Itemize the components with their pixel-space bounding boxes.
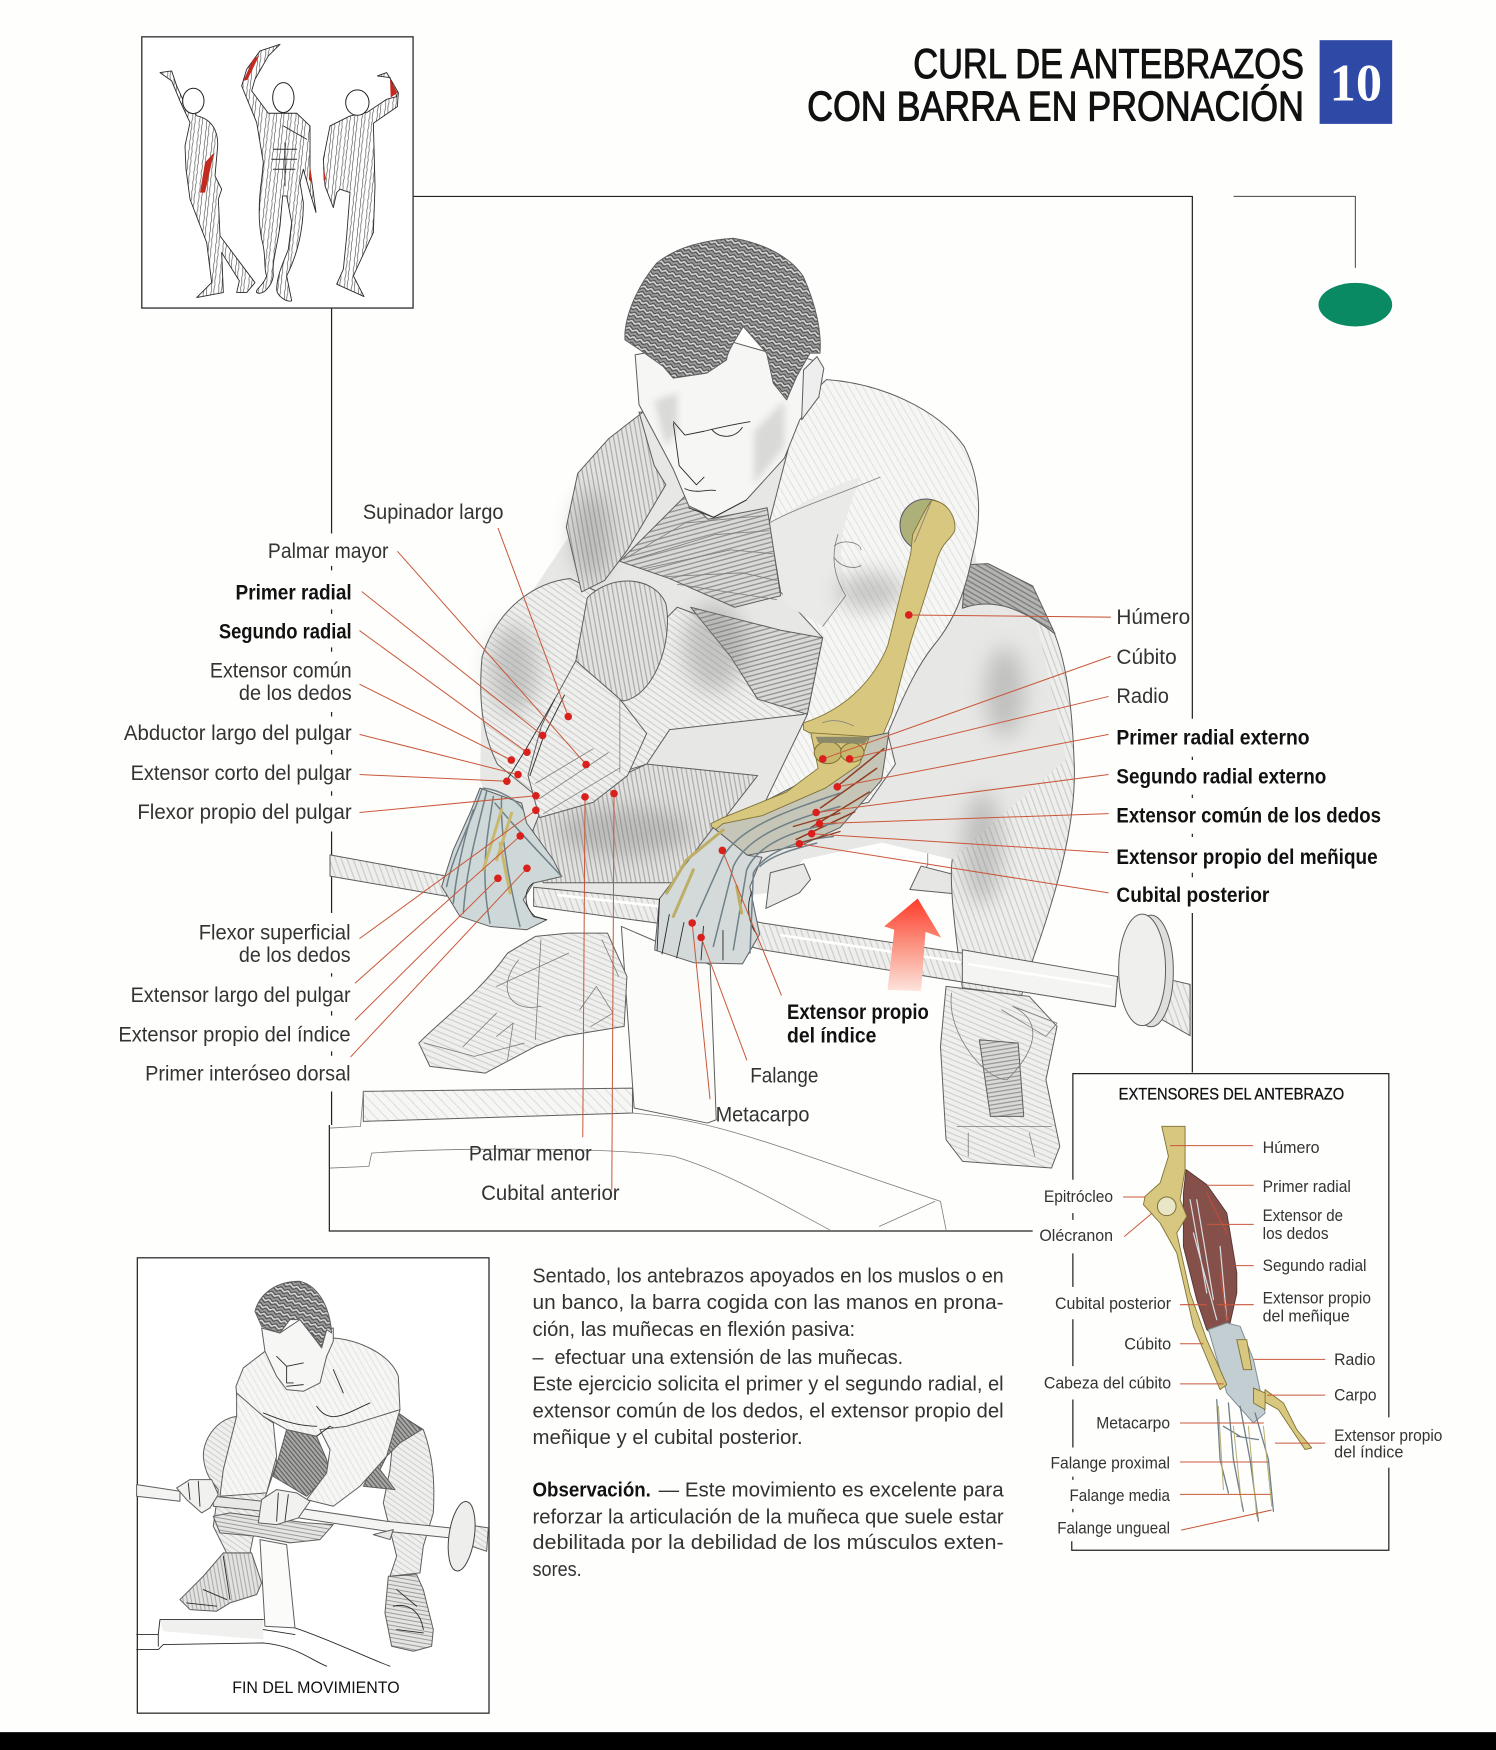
panel: end of movement — [137, 1258, 489, 1713]
bottom black band — [0, 1732, 1496, 1750]
label: Cubital posterior — [796, 840, 1269, 907]
instructions text: Sentado, los antebrazos apoyados en los muslos o en — [533, 1265, 1004, 1287]
label: Palmar menor — [469, 793, 592, 1166]
label: Palmar menor: Palmar menor — [469, 1143, 592, 1166]
label: Primer radial externo — [834, 726, 1310, 791]
main illustration: seated wrist curl — [330, 238, 1190, 1230]
inset labels: Extensor propio — [1334, 1427, 1442, 1445]
title — [807, 41, 1304, 130]
label: Primer radial externo: Primer radial externo — [1116, 726, 1310, 749]
left shoe — [419, 933, 627, 1073]
label: Extensor corto del pulgar: Extensor corto del pulgar — [131, 762, 352, 785]
label: Supinador largo — [363, 501, 572, 720]
ear — [802, 357, 824, 420]
label: Segundo radial: Segundo radial — [219, 620, 352, 643]
label: Primer interóseo dorsal: Primer interóseo dorsal — [145, 1062, 351, 1085]
label: Flexor propio del pulgar — [137, 792, 540, 824]
inset arm illustration — [1143, 1126, 1312, 1521]
forearm bones — [711, 733, 869, 832]
inset labels: Metacarpo — [1096, 1415, 1170, 1433]
label: Flexor superficial de los dedos: Flexor superficial — [199, 922, 351, 945]
observation text: sores. — [533, 1559, 582, 1581]
exercise number badge — [1320, 40, 1392, 124]
inset labels: del meñique — [1263, 1307, 1350, 1325]
forearm muscles — [713, 733, 889, 855]
observation text: Observación. — [533, 1480, 651, 1502]
inset labels: Falange proximal — [1051, 1455, 1170, 1473]
left hand with tendons — [442, 788, 562, 930]
figure: side view — [160, 71, 255, 298]
label: Cubital anterior: Cubital anterior — [481, 1182, 620, 1205]
label: Extensor propio del índice — [719, 847, 929, 1047]
label: Palmar mayor: Palmar mayor — [268, 540, 389, 563]
inset labels: Primer radial — [1263, 1178, 1351, 1196]
label: Extensor propio del índice: Extensor propio — [787, 1001, 929, 1024]
inset leaders — [1123, 1146, 1325, 1530]
barbell — [330, 855, 1118, 1007]
figure: front view — [242, 44, 316, 301]
inset labels: Carpo — [1334, 1387, 1377, 1405]
inset labels: Epitrócleo — [1044, 1188, 1113, 1206]
observation text: debilitada por la debilidad de los músculos exten- — [533, 1532, 1004, 1554]
label: Extensor largo del pulgar: Extensor largo del pulgar — [131, 984, 351, 1007]
instructions text: – efectuar una extensión de las muñecas. — [533, 1347, 903, 1369]
label: Extensor propio del índice: Extensor propio del índice — [118, 1023, 351, 1046]
inset labels: Húmero — [1263, 1139, 1320, 1157]
facial features — [673, 422, 750, 517]
inset labels: Segundo radial — [1263, 1257, 1366, 1275]
right leg — [882, 591, 1074, 996]
inset labels: Radio — [1334, 1351, 1375, 1369]
label: Extensor común de los dedos: Extensor común de los dedos — [1116, 805, 1381, 828]
right hand grip loop — [766, 864, 811, 908]
label: Abductor largo del pulgar: Abductor largo del pulgar — [124, 722, 352, 745]
face — [635, 339, 819, 517]
inset labels: Extensor de — [1263, 1207, 1343, 1225]
bench pad and thigh between arms — [524, 764, 758, 883]
biceps — [576, 581, 667, 701]
inset labels: Cubital posterior — [1055, 1295, 1172, 1313]
soft shading — [489, 491, 1025, 904]
label: Extensor común de los dedos — [816, 805, 1381, 828]
label: Extensor propio del índice — [118, 875, 502, 1046]
end position caption: FIN DEL MOVIMIENTO — [232, 1679, 400, 1697]
label: Segundo radial externo: Segundo radial externo — [1116, 765, 1326, 788]
exercise number badge: 10 — [1330, 54, 1382, 112]
instructions text: meñique y el cubital posterior. — [533, 1427, 803, 1449]
thumbnail panel: muscle location figures — [142, 37, 413, 308]
body silhouette base tone — [480, 379, 1066, 904]
right hand with tendons — [655, 828, 762, 964]
inset labels: Falange media — [1070, 1487, 1170, 1505]
inset labels: Cúbito — [1124, 1335, 1171, 1353]
humerus bone — [900, 499, 952, 551]
shorts — [962, 564, 1055, 634]
label: Primer interóseo dorsal — [145, 865, 531, 1085]
bench ledge behind arm — [910, 765, 969, 895]
instructions text: extensor común de los dedos, el extensor propio del — [533, 1400, 1004, 1422]
inset labels: Extensor propio — [1263, 1290, 1371, 1308]
label: Cubital anterior — [481, 790, 620, 1205]
inset labels — [1039, 1139, 1442, 1537]
label: Primer radial — [236, 581, 546, 739]
bench post — [621, 926, 716, 1123]
label: Húmero — [905, 606, 1190, 629]
chest muscle fan — [620, 496, 781, 607]
label: Extensor común de los dedos — [210, 659, 515, 764]
label: Falange — [697, 934, 818, 1088]
barbell end and weight plate — [1119, 914, 1190, 1036]
label: Extensor común de los dedos: de los dedos — [239, 682, 352, 705]
right shoe — [940, 986, 1060, 1168]
label: Segundo radial externo — [812, 765, 1326, 816]
label: Flexor superficial de los dedos — [199, 806, 540, 967]
observation text: reforzar la articulación de la muñeca que suele estar — [533, 1506, 1004, 1528]
anatomy labels: left column — [118, 501, 620, 1205]
label: Falange: Falange — [750, 1065, 818, 1088]
label: Flexor superficial de los dedos: de los dedos — [239, 944, 351, 967]
label: Húmero: Húmero — [1116, 606, 1190, 629]
lift direction arrow — [884, 898, 941, 991]
instructions text: ción, las muñecas en flexión pasiva: — [533, 1319, 855, 1341]
bench base — [330, 926, 946, 1230]
abdomen — [691, 607, 823, 714]
label: Extensor propio del índice: del índice — [787, 1024, 877, 1047]
label: Metacarpo: Metacarpo — [716, 1104, 809, 1127]
anatomy labels: right column — [688, 606, 1381, 1127]
instructions text: Este ejercicio solicita el primer y el segundo radial, el — [533, 1374, 1004, 1396]
chest shading — [769, 477, 861, 626]
label: Extensor común de los dedos: Extensor común — [210, 659, 352, 682]
label: Radio: Radio — [1116, 685, 1169, 708]
label: Extensor corto del pulgar — [131, 762, 511, 785]
hair — [625, 238, 820, 400]
label: Primer radial: Primer radial — [236, 581, 352, 604]
inset labels: Olécranon — [1039, 1227, 1113, 1245]
label: Flexor propio del pulgar: Flexor propio del pulgar — [137, 801, 352, 824]
right forearm and bones — [804, 499, 955, 741]
inset labels: Cabeza del cúbito — [1044, 1374, 1171, 1392]
title: CURL DE ANTEBRAZOS — [913, 41, 1304, 87]
inset heading: EXTENSORES DEL ANTEBRAZO — [1119, 1085, 1344, 1103]
label: Palmar mayor — [268, 540, 590, 768]
label: Radio — [846, 685, 1169, 763]
inset labels: Falange ungueal — [1057, 1519, 1170, 1537]
title: CON BARRA EN PRONACIÓN — [807, 84, 1304, 130]
label: Cúbito — [819, 646, 1177, 763]
end position illustration — [137, 1281, 488, 1666]
torso and raised upper arm — [754, 380, 979, 825]
observation text — [533, 1480, 1004, 1581]
inset panel: forearm extensors — [1039, 1074, 1442, 1550]
label: Extensor largo del pulgar — [131, 832, 524, 1007]
label: Cúbito: Cúbito — [1116, 646, 1177, 669]
label: Extensor propio del meñique — [808, 830, 1378, 869]
observation text: — Este movimiento es excelente para — [659, 1480, 1004, 1502]
label: Segundo radial — [219, 620, 531, 756]
label: Cubital posterior: Cubital posterior — [1116, 884, 1269, 907]
label: Extensor propio del meñique: Extensor propio del meñique — [1116, 846, 1378, 869]
figure: back view — [323, 73, 398, 297]
inset labels: del índice — [1334, 1444, 1403, 1462]
left thigh — [481, 579, 823, 799]
label: Metacarpo — [688, 919, 809, 1127]
main frame lines — [329, 196, 1192, 1231]
inset labels: los dedos — [1263, 1225, 1329, 1243]
instructions text: un banco, la barra cogida con las manos en prona- — [533, 1292, 1004, 1314]
instructions text — [533, 1265, 1004, 1449]
left deltoid and arm — [566, 412, 666, 592]
label: Supinador largo: Supinador largo — [363, 501, 504, 524]
label: Abductor largo del pulgar — [124, 722, 522, 778]
green section marker with connector — [1234, 196, 1392, 326]
left forearm — [528, 661, 647, 818]
